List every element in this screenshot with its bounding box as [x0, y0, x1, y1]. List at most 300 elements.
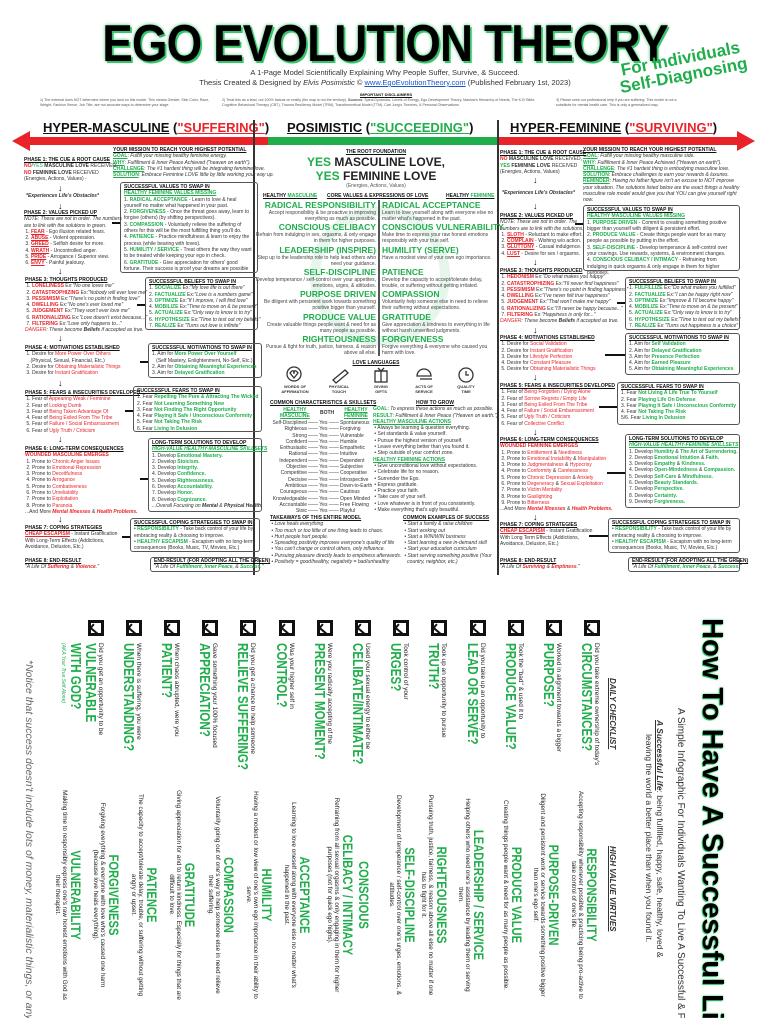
mission — [582, 147, 740, 203]
high value virtues list: Voluntarily going out of one's way to help someone else in need relieve their suffering. — [207, 796, 221, 994]
long-term solutions box — [625, 434, 740, 508]
high value virtues list: COMPASSION — [221, 857, 237, 933]
phase 6: ...And More Mental Illnesses & Health Problems. — [25, 509, 138, 515]
daily checklist: Took up an opportunity to pursue — [440, 643, 447, 738]
takeaways: • Spreading positivity improves everyone's quality of life — [271, 540, 394, 546]
phase 7: CHEAP ESCAPISM - Instant Gratification — [25, 531, 117, 537]
how to grow: • Leave everything better than you found it. — [374, 444, 470, 450]
phase 3: 2. CATASTROPHIZING Ex:"I'll never find happiness" — [501, 281, 619, 287]
root foundation: THE ROOT FOUNDATION — [346, 149, 406, 155]
phase 8: "A Life Of Suffering & Violence." — [25, 564, 99, 570]
phase 6: PHASE 6: LONG-TERM CONSEQUENCES — [25, 446, 124, 452]
core values pairs: Learn to love yourself along with everyone else no matter what's happened in the past. — [382, 210, 493, 222]
mission — [113, 147, 274, 178]
fears swap box: 5/6. Fear Living In Delusion — [621, 415, 685, 421]
phase 3: 1. LONELINESS Ex:"No one loves me" — [26, 283, 114, 289]
characteristics table: Decisive — [288, 477, 307, 483]
core values pairs: FORGIVENESS — [382, 334, 443, 344]
high value virtues list: The capacity to accept/tolerate delay, trouble, or suffering without getting angry or upset. — [130, 794, 144, 996]
characteristics table: Down-to-Earth — [340, 483, 372, 489]
core values pairs: Make time to express your raw honest emotions responsibly with your true self. — [382, 232, 488, 244]
header: hyper-feminine: HYPER-FEMININE ("SURVIVING") — [510, 120, 717, 135]
long-term solutions box: ...Overall Focusing on Mental & Physical Health. — [152, 503, 262, 509]
core values pairs: Develop temperance / self-control over your appetites, emotions, urges, & attitudes. — [256, 277, 376, 289]
beliefs swap box: 7. REALIZE Ex:"Turns out love is infinite" — [149, 323, 240, 329]
phase 3: 1. HEDONISM Ex:"Do what makes you happy" — [501, 274, 605, 280]
phase 3: 7. FILTERING Ex:"Love only happens to..." — [26, 321, 122, 327]
love languages: GIVING — [374, 384, 388, 389]
phase 2: 2. COMPLAIN - Wishing w/o action. — [501, 238, 581, 244]
characteristics table — [270, 400, 376, 514]
characteristics table: —— Yes —— — [308, 470, 339, 476]
takeaways: • Hurt people hurt people. — [271, 534, 328, 540]
phase 6: WOUNDED FEMININE EMERGES — [500, 443, 578, 449]
phase 4: PHASE 4: MOTIVATIONS ESTABLISHED — [25, 345, 120, 351]
characteristics table: BOTH — [320, 410, 334, 416]
characteristics table: Righteous — [284, 426, 307, 432]
long-term solutions box: 2. Develop Emotional Intuition & Faith. — [629, 455, 719, 461]
phase 6: 8. Prone to Paranoia — [26, 503, 72, 509]
phase 6: ...And More Mental Illnesses & Health Problems. — [500, 506, 613, 512]
phase 5: 6. Fear of Ugly Truth / Criticism — [26, 428, 95, 434]
phase 2: 3. GLUTTONY - Casual indulgence. — [501, 244, 581, 250]
high value virtues list: RESPONSIBILITY — [584, 848, 600, 942]
phase 6: 9. Prone to Bitterness — [501, 500, 549, 506]
phase 6: 4. Prone to Arrogance — [26, 477, 75, 483]
characteristics table: Subjective — [340, 464, 363, 470]
end-result box — [150, 557, 260, 572]
fears swap box: 2. Fear Playing Life On Defense — [621, 397, 695, 403]
subtitle: A 1-Page Model Scientifically Explaining Why People Suffer, Survive, & Succeed. — [250, 68, 520, 77]
phase 7: Avoidance, Delusion, Etc.) — [500, 541, 559, 547]
phase 5 — [25, 390, 140, 434]
beliefs swap box — [625, 277, 740, 330]
values swap box: 2. PRODUCE VALUE - Create things people want for as many people as possible by putting in the effort. — [587, 232, 726, 244]
long-term solutions box: 6. Develop Accountability. — [152, 484, 213, 490]
mission: CHALLENGE: The #1 hardest thing is embodying masculine love. — [583, 166, 729, 172]
beliefs swap box: 5. ACTUALIZE Ex:"Only way to know is to try" — [149, 310, 252, 316]
phase 4 — [25, 345, 121, 376]
characteristics table: Ambitious — [285, 483, 307, 489]
high value virtues list — [38, 560, 768, 1020]
daily checklist: Took control of your — [402, 643, 409, 700]
how to grow — [373, 400, 498, 513]
beliefs swap box: SUCCESSFUL BELIEFS TO SWAP IN — [629, 279, 716, 285]
phase 4: 3. Desire for Lifestyle Perfection — [501, 354, 572, 360]
values swap box: 3. SELF-DISCIPLINE - Develop temperance & self-control over your cravings. Use rewards, systems, & environment changes. — [587, 245, 727, 257]
motivations swap box: 1. Aim for Self Validation — [629, 341, 686, 347]
phase 6: 2. Prone to Emotional Instability & Manipulation — [501, 456, 606, 462]
high value virtues list: SELF-DISCIPLINE — [402, 847, 418, 943]
love languages — [281, 360, 475, 394]
common examples of success: country, neighbor, etc.) — [407, 559, 458, 565]
phase 3: 2. CATASTROPHIZING Ex:"Nobody will ever love me" — [26, 290, 147, 296]
phase 3: 5. JUDGEMENT Ex:"They won't ever love me" — [26, 308, 130, 314]
motivations swap box: 3. Aim for Presence Perfection — [629, 354, 700, 360]
common examples of success: • Start working out — [404, 528, 445, 534]
beliefs swap box: 3. OPTIMIZE Ex:"Improve & I'll become happy" — [629, 298, 733, 304]
phase 6: PHASE 6: LONG-TERM CONSEQUENCES — [500, 437, 599, 443]
panel: hyper-masculine column: ↓ — [58, 201, 62, 211]
panel: hyper-feminine column — [500, 147, 748, 572]
high value virtues list: HUMILITY — [259, 869, 275, 921]
daily checklist: CIRCUMSTANCES? — [578, 643, 594, 751]
core values pairs: LEADERSHIP (INSPIRE) — [279, 245, 376, 255]
mission: YOUR MISSION TO REACH YOUR HIGHEST POTENTIAL — [583, 147, 716, 153]
mission: YOUR MISSION TO REACH YOUR HIGHEST POTENTIAL — [113, 147, 246, 153]
bar: center green — [268, 137, 497, 145]
common examples of success: • Start a family & raise children — [404, 521, 473, 527]
values swap box: 6. GRATITUDE - Give appreciation for others' good fortune. Their success is proof your dreams are possible — [124, 260, 248, 272]
phase 1: PHASE 1: THE CUE & ROOT CAUSE — [500, 150, 586, 156]
phase 5: 6. Fear of Collective Conflict — [501, 421, 564, 427]
characteristics table: MASCULINE — [280, 413, 310, 419]
core values pairs: SELF-DISCIPLINE — [304, 267, 376, 277]
mission: REMINDER: Having no father figure isn't an excuse to NOT improve your situation. The solutions listed below are the exact things a healthy masculine role model would give you that YOU can give yourself right now. — [583, 178, 739, 203]
arrow: left red — [12, 131, 268, 151]
characteristics table: —— Yes —— — [308, 439, 339, 445]
phase 6: 5. Prone to Chronic Depression & Anxiety — [501, 475, 593, 481]
characteristics table: Cautious — [340, 489, 360, 495]
successful life definition: A Successful Life : being fulfilled, happy, safe, healthy, loved & — [655, 720, 665, 958]
high value virtues list: VULNERABILITY — [68, 850, 84, 940]
high value virtues list: GRATITUDE — [182, 863, 198, 927]
daily checklist: When chaos abrupted, were you — [173, 643, 180, 737]
phase 4: 5. Desire for Obtaining Materialistic Things — [501, 366, 596, 372]
characteristics table: —— Yes —— — [308, 426, 339, 432]
how to grow: • Celebrate life for no reason. — [374, 469, 439, 475]
phase 2: numbers are to link with the solutions. — [500, 226, 584, 232]
love languages: AFFIRMATION — [281, 388, 309, 394]
phase 5: 3. Fear of Being Taken Advantage Of — [26, 409, 108, 415]
root foundation — [307, 149, 445, 189]
how to grow: • Take care of your self. — [374, 494, 426, 500]
love languages: PHYSICAL — [329, 384, 349, 389]
panel: hyper-masculine column: ↓ — [58, 266, 62, 276]
high value virtues list: CELIBACY / INTIMACY — [340, 835, 356, 955]
long-term solutions box: 5. Develop Self-Care & Mindfulness. — [629, 474, 713, 480]
core values pairs: Forgive everything & everyone who caused you harm with love. — [382, 344, 487, 356]
phase 7: With Long-Term Effects (Addictions, — [25, 538, 104, 544]
phase 3 — [25, 277, 148, 333]
phase 2: 3. GREED - Selfish desire for more. — [25, 241, 105, 247]
panel: hyper-feminine column: ↓ — [533, 372, 538, 382]
long-term solutions box: 6. Develop Beauty Standards. — [629, 480, 698, 486]
coping swap box: • RESPONSIBILITY - Take back control of your life by embracing reality & choosing to improve. — [612, 526, 731, 539]
beliefs swap box — [145, 277, 258, 330]
long-term solutions box: LONG-TERM SOLUTIONS TO DEVELOP — [629, 436, 723, 442]
subtitle: Thesis Created & Designed by Elvis Posimistic © www.EgoEvolutionTheory.com (Published February 1st, 2023) — [199, 78, 571, 87]
fears swap box: SUCCESSFUL FEARS TO SWAP IN — [137, 388, 220, 394]
beliefs swap box: 5. ACTUALIZE Ex:"Only way to know is to try" — [629, 310, 732, 316]
core values pairs: PRODUCE VALUE — [303, 312, 376, 322]
long-term solutions box: 9. Develop Forgiveness. — [629, 499, 685, 505]
phase 6: 3. Prone to Judgmentalness & Hypocrisy — [501, 462, 592, 468]
characteristics table: —— Yes —— — [308, 508, 339, 514]
characteristics table: Forgiving — [340, 426, 361, 432]
common examples of success: • Start serving something positive (Your — [404, 553, 492, 559]
core values pairs: CONSCIOUS VULNERABILITY — [382, 222, 504, 232]
beliefs swap box: 2. FACTUALIZE Ex:"I can be happy right now" — [629, 292, 732, 298]
phase 3: 5. JUDGEMENT Ex:"That won't make me happy" — [501, 299, 610, 305]
takeaways: • Pursuing pleasure directly leads to emptiness afterwards. — [271, 553, 401, 559]
phase 2: 5. PRIDE - Arrogance / Superior view. — [25, 254, 109, 260]
phase 1 — [24, 157, 117, 182]
end-result box: END-RESULT (FOR ADOPTING ALL THE GREEN) — [154, 558, 270, 564]
fears swap box: 5. Fear Not Taking The Risk — [137, 419, 202, 425]
header: hyper-masculine: HYPER-MASCULINE ("SUFFERING") — [43, 120, 269, 135]
long-term solutions box — [148, 438, 262, 512]
header: posimistic: POSIMISTIC ("SUCCEEDING") — [287, 120, 473, 135]
fears swap box: 1. Fear Not Living A Life True To Yourself — [621, 390, 718, 396]
characteristics table: —— Yes —— — [308, 483, 339, 489]
daily checklist: Gave something your 100% focused — [211, 643, 218, 748]
long-term solutions box: HIGH-VALUE HEALTHY-MASCULINE SKILLSETS — [152, 446, 267, 452]
panel: hyper-feminine column: ↓ — [533, 427, 538, 437]
phase 3: PHASE 3: THOUGHTS PRODUCED — [25, 277, 108, 283]
disclaimers: 3) Please seek out professional help if you are suffering. This model is not a substitute for mental health care. This is only a generalized map. — [556, 98, 677, 107]
title: EGO EVOLUTION THEORY — [102, 15, 668, 73]
high value virtues list: Pursuing truth, justice, fairness, & reason above all else no matter if one has to fight for it. — [420, 795, 434, 995]
characteristics table: Independent — [279, 458, 307, 464]
panel: posimistic column — [256, 149, 504, 565]
daily checklist: RELIEVE SUFFERING? — [234, 643, 250, 770]
end-result box: "A Life Of Fulfillment, Inner Peace, & Success." — [632, 564, 742, 570]
core values pairs: HUMILITY (SERVE) — [382, 245, 459, 255]
characteristics table: Strong — [292, 433, 307, 439]
watermark circle — [310, 206, 450, 346]
phase 2: 1. SLOTH - Reluctant to make effort. — [501, 232, 583, 238]
core values pairs: Develop the capacity to accept/tolerate delay, trouble, or suffering without getting irritated. — [382, 277, 483, 289]
phase 5: 2. Fear of Looking Dumb — [26, 403, 81, 409]
how to grow: GOAL: To express these actions as much as possible. — [373, 406, 493, 412]
phase 7: PHASE 7: COPING STRATEGIES — [500, 522, 577, 528]
phase 3 — [500, 268, 628, 324]
daily checklist: Did you take up an opportunity to — [479, 643, 486, 738]
daily checklist: PRODUCE VALUE? — [502, 643, 518, 750]
core values header: HEALTHY MASCULINE — [263, 193, 317, 199]
characteristics table: —— Yes —— — [308, 458, 339, 464]
characteristics table: —— Yes —— — [308, 451, 339, 457]
long-term solutions box: HIGH-VALUE HEALTHY-FEMININE SKILLSETS — [629, 442, 738, 448]
phase 6: 4. Prone to Conformity & Carelessness — [501, 468, 588, 474]
coping swap box: • RESPONSIBILITY - Take back control of your life by embracing reality & choosing to improve. — [134, 526, 253, 539]
how to grow: RESULT: Fulfillment & Inner Peace ("Heaven on earth.") — [373, 413, 498, 419]
phase 2: PHASE 2: VALUES PICKED UP — [24, 210, 97, 216]
motivations swap box: 2. Aim for Obtaining Meaningful Experiences — [152, 364, 256, 370]
phase 4: 2. Desire for Obtaining Materialistic Things — [26, 364, 121, 370]
phase 8 — [25, 558, 100, 570]
panel: hyper-feminine column: ↓ — [533, 325, 538, 335]
daily checklist: When there is suffering, you were — [135, 643, 142, 740]
characteristics table: Dependent — [340, 458, 364, 464]
common examples of success: • Start learning a new in-demand skill — [404, 540, 487, 546]
long-term solutions box: 4. Develop Confidence. — [152, 471, 206, 477]
long-term solutions box: 5. Develop Righteousness. — [152, 478, 215, 484]
panel: hyper-feminine column: ↓ — [533, 175, 538, 185]
love languages: ACTS OF — [415, 384, 433, 389]
takeaways — [270, 515, 401, 565]
phase 5: 5. Fear of Ugly Truth / Criticism — [501, 414, 570, 420]
successful life definition — [644, 720, 665, 958]
characteristics table: FEMININE — [344, 413, 368, 419]
daily checklist heading: DAILY CHECKLIST — [608, 678, 617, 749]
characteristics table: —— Yes —— — [308, 477, 339, 483]
core values pairs: Give appreciation & kindness to everything in life without harsh unverified judgments. — [382, 322, 490, 334]
values swap box: 4. CONSCIOUS CELIBACY / INTIMACY - Refraining from indulging in quick orgasms & only engage in them for higher purposes. — [587, 257, 720, 276]
motivations swap box: SUCCESSFUL MOTIVATIONS TO SWAP IN — [629, 335, 729, 341]
high value virtues heading: HIGH VALUE VIRTUES — [608, 846, 617, 932]
fears swap box: 3. Fear Not Finding The Right Opportunity — [137, 407, 236, 413]
long-term solutions box: 7. Develop Perspective. — [629, 486, 684, 492]
daily checklist: Worked in alignment towards a bigger — [555, 643, 562, 752]
core values pairs: Step up to the leadership role to help lead others who need your guidance. — [258, 255, 376, 267]
coping swap box: • HEALTHY ESCAPISM - Escapism with no long-term consequences (Books, Music, TV, Movies, Etc.) — [612, 539, 732, 551]
characteristics table: Rational — [289, 451, 307, 457]
panel: hyper-feminine column: ↓ — [533, 512, 538, 522]
motivations swap box: 5. Aim for Obtaining Meaningful Experiences — [629, 366, 733, 372]
coping swap box — [608, 518, 740, 553]
phase 5: 2. Fear of Sorrow Regrets / Empty Life — [501, 396, 587, 402]
motivations swap box: SUCCESSFUL MOTIVATIONS TO SWAP IN — [152, 345, 252, 351]
characteristics table: Empathetic — [340, 445, 365, 451]
core values pairs: RIGHTEOUSNESS — [302, 334, 376, 344]
daily checklist: Used your sexual energy to either be — [364, 643, 371, 749]
core values pairs: GRATITUDE — [382, 312, 431, 322]
phase 2 — [500, 213, 584, 257]
high value virtues list: LEADERSHIP / SERVICE — [471, 830, 487, 960]
coping swap box: SUCCESSFUL COPING STRATEGIES TO SWAP IN — [134, 520, 253, 526]
phase 3: 3. PESSIMISM Ex:"There's no point in finding happiness" — [501, 287, 628, 293]
characteristics table: —— Yes —— — [308, 496, 339, 502]
end-result box: "A Life Of Fulfillment, Inner Peace, & Success." — [154, 564, 264, 570]
fears swap box: 4. Fear Not Taking The Risk — [621, 409, 686, 415]
characteristics table: Self-Disciplined — [273, 420, 307, 426]
high value virtues list: Creating things people want & need for as many people as possible. — [502, 800, 509, 990]
how to grow: • Make everything that's ugly beautiful. — [374, 507, 460, 513]
characteristics table: Free Flowing — [340, 502, 369, 508]
values swap box: 4. PATIENCE - Practice mindfulness & learn to enjoy the process (while bearing with loves). — [124, 234, 249, 247]
fears swap box: 4. Fear Playing It Safe / Unconscious Conformity — [137, 413, 252, 419]
phase 6: 1. Prone to Entitlement & Neediness — [501, 450, 582, 456]
love languages: SERVICE — [415, 388, 433, 394]
phase 6: 6. Prone to Degeneracy & Sexual Exploitation — [501, 481, 603, 487]
phase 4: (Physical, Sexual, Financial, Etc.) — [31, 358, 105, 364]
daily checklist: PATIENT? — [158, 643, 174, 698]
high value virtues list: ACCEPTANCE — [297, 857, 313, 933]
long-term solutions box: 3. Develop Empathy & Kindness. — [629, 461, 705, 467]
phase 5: PHASE 5: FEARS & INSECURITIES DEVELOPED — [500, 383, 615, 389]
disclaimers — [40, 92, 677, 107]
characteristics table: —— Yes —— — [308, 464, 339, 470]
disclaimers: 2) Treat this as a lead, not 100% factual on reality (the map is not the territory). Sources: Spiral Dynamics, Levels of Energy, Ego Development Theory, Maslow's Hierarchy of Needs, The KJV Bible, Cognitive Behavioral Therapy (CBT), Trauma Resiliency Model (TRM), Transtheoretical Model (TTM), Carl Jung's Theories, & Personal Observations. — [222, 98, 535, 107]
takeaways: • Too much or too little of one thing leads to chaos. — [271, 528, 383, 534]
beliefs swap box: 2. FACTUALIZE Ex:"Love is a numbers game" — [149, 292, 253, 298]
core values pairs — [256, 200, 504, 356]
fears swap box — [617, 382, 740, 425]
phase 3: 6. RATIONALIZING Ex:"I'll never be happy because..." — [501, 306, 623, 312]
phase 5: 3. Fear of Being Exiled From The Tribe — [501, 402, 587, 408]
love languages: GIFTS — [375, 388, 387, 394]
fears swap box: 3. Fear Playing It Safe / Unconscious Conformity — [621, 403, 736, 409]
daily checklist: Did you get an opportunity to be(AKA Your True Self Alone) — [60, 643, 104, 735]
panel: hyper-masculine column: *Experiences Life's Obstacles* — [26, 193, 99, 199]
characteristics table: Stoic — [296, 508, 307, 514]
phase 2: NOTE: These are not in order. The numbers — [24, 216, 122, 222]
panel: hyper-masculine column: ↓ — [58, 333, 62, 343]
how to grow: • Step outside of your comfort zone. — [374, 450, 454, 456]
disclaimers: IMPORTANT DISCLAIMERS — [360, 92, 412, 97]
coping swap box: SUCCESSFUL COPING STRATEGIES TO SWAP IN — [612, 520, 731, 526]
values swap box: SUCCESSFUL VALUES TO SWAP IN — [124, 184, 210, 190]
phase 3: 6. RATIONALIZING Ex:"Love doesn't exist because..." — [26, 315, 147, 321]
mission: SOLUTION: Embrace Feminine LOVE little by little working your way up. — [113, 172, 274, 178]
phase 5: 4. Fear of Being Exiled From The Tribe — [26, 415, 112, 421]
values swap box: 5. HUMILITY / SERVICE - Treat others the way they want to be treated while keeping your ego in check. — [124, 247, 252, 259]
end-result box: END-RESULT (FOR ADOPTING ALL THE GREEN) — [632, 558, 748, 564]
high value virtues list: PATIENCE — [144, 868, 160, 922]
mission: SOLUTION: Embrace challenges to earn your rewards & luxuries. — [583, 172, 729, 178]
beliefs swap box: 6. HYPOTHESIZE Ex:"Time to test out my beliefs" — [629, 317, 740, 323]
core values header — [263, 193, 494, 199]
takeaways: • You can't change or control others, only influence. — [271, 546, 385, 552]
phase 2: are to link with the solutions in green. — [24, 223, 106, 229]
phase 2: 1. FEAR - Ego illusion related fears. — [25, 229, 105, 235]
long-term solutions box: LONG-TERM SOLUTIONS TO DEVELOP — [152, 440, 246, 446]
beliefs swap box: 3. OPTIMIZE Ex:"If I improve, I will find love" — [149, 298, 248, 304]
how to grow: HEALTHY FEMININE ACTIONS — [373, 457, 445, 463]
panel: hyper-masculine column — [24, 147, 274, 572]
love languages: WORDS OF — [284, 384, 306, 389]
characteristics table: Introspective — [340, 477, 368, 483]
phase 4: 2. Desire for Instant Gratification — [501, 348, 573, 354]
phase 7 — [25, 525, 118, 550]
beliefs swap box: SUCCESSFUL BELIEFS TO SWAP IN — [149, 279, 236, 285]
high value virtues list: Having a modest or low view of one's own ego importance in their ability to serve. — [245, 791, 259, 999]
panel: hyper-masculine column: ↓ — [58, 183, 62, 193]
phase 2: PHASE 2: VALUES PICKED UP — [500, 213, 573, 219]
phase 4: 1. Desire for Social Validation — [501, 341, 567, 347]
coping swap box — [130, 518, 260, 552]
root foundation: YES FEMININE LOVE — [316, 169, 436, 183]
phase 7: CHEAP ESCAPISM - Instant Gratification — [500, 528, 592, 534]
love languages: QUALITY — [457, 384, 475, 389]
values swap box — [120, 182, 258, 273]
long-term solutions box: 7. Develop Honor. — [152, 490, 193, 496]
daily checklist: CELIBATE/INTIMATE? — [349, 643, 365, 764]
long-term solutions box: 4. Develop Open-Mindedness & Compassion. — [629, 467, 735, 473]
common examples of success — [403, 515, 492, 565]
characteristics table: —— Yes —— — [308, 489, 339, 495]
characteristics table: —— Yes —— — [308, 502, 339, 508]
characteristics table: —— Yes —— — [308, 433, 339, 439]
characteristics table: —— Yes —— — [308, 420, 339, 426]
phase 3: 4. DWELLING Ex:"I've never felt true happiness" — [501, 293, 610, 299]
phase 5 — [500, 383, 616, 427]
phase 1 — [500, 150, 586, 175]
how to grow: • Give unconditional love without expectations. — [374, 463, 477, 469]
high value virtues list: Accepting responsibility whenever possible & practicing being pro-active to take control of one's life. — [570, 791, 584, 999]
daily checklist: Were you radically accepting of the — [326, 643, 333, 744]
how to grow: • Love whatever is in front of you consistently. — [374, 501, 475, 507]
daily checklist: PURPOSE? — [540, 643, 556, 707]
high value virtues list: PRODUCE VALUE — [509, 847, 525, 943]
fears swap box: 6. Fear Living In Delusion — [137, 426, 197, 432]
core values pairs: Pursue & fight for truth, justice, fairness, & reason above all else. — [266, 344, 376, 356]
tagline: for individuals self-diagnosing: For Individuals — [619, 38, 742, 80]
mission: CHALLENGE: The #1 hardest thing will be integrating feminine love. — [113, 166, 265, 172]
phase 1: NO/YES MASCULINE LOVE RECEIVED, — [24, 163, 117, 169]
